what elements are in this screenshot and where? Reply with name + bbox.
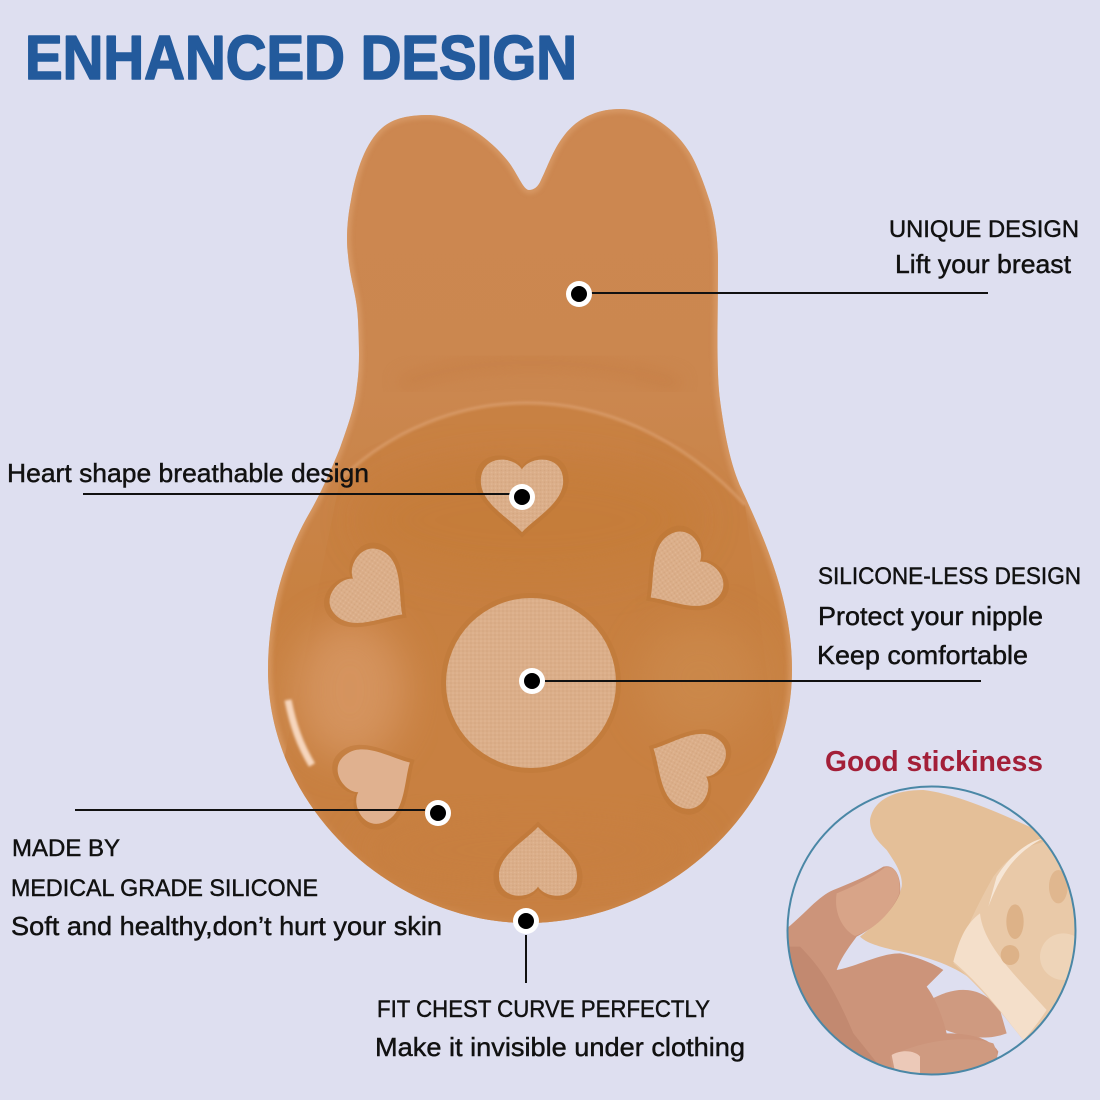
callout: heart shape breathable design <box>7 458 535 510</box>
callout: medical grade silicone <box>11 800 451 941</box>
hand <box>780 866 998 1080</box>
callout: heart shape breathable design: Heart shape breathable design <box>7 458 369 488</box>
callout: medical grade silicone: MADE BY <box>12 835 120 862</box>
fingers behind <box>930 990 1007 1038</box>
callout: medical grade silicone: Soft and healthy,don’t hurt your skin <box>11 911 442 941</box>
heading: good stickiness: Good stickiness <box>825 746 1043 778</box>
callout: fit chest curve: FIT CHEST CURVE PERFECTLY <box>377 996 710 1023</box>
title: ENHANCED DESIGN <box>25 24 577 93</box>
patch <box>860 790 1044 1040</box>
callout: medical grade silicone: MEDICAL GRADE SILICONE <box>11 875 318 902</box>
inset photo: hand holding patch <box>780 786 1087 1080</box>
callout: silicone-less design: Keep comfortable <box>817 640 1028 670</box>
callout: silicone-less design: Protect your nipple <box>818 601 1043 631</box>
callout: unique design: Lift your breast <box>895 249 1072 279</box>
callout: unique design <box>566 216 1079 307</box>
callout: fit chest curve <box>375 908 745 1062</box>
center breathable circle <box>441 593 621 773</box>
product: rabbit-ear silicone lift patch <box>250 109 800 930</box>
callout: fit chest curve: Make it invisible under clothing <box>375 1032 745 1062</box>
callout: silicone-less design <box>519 563 1081 694</box>
callout: unique design: UNIQUE DESIGN <box>889 216 1079 243</box>
breathable hearts <box>315 456 739 900</box>
callout: silicone-less design: SILICONE-LESS DESIGN <box>818 563 1081 590</box>
